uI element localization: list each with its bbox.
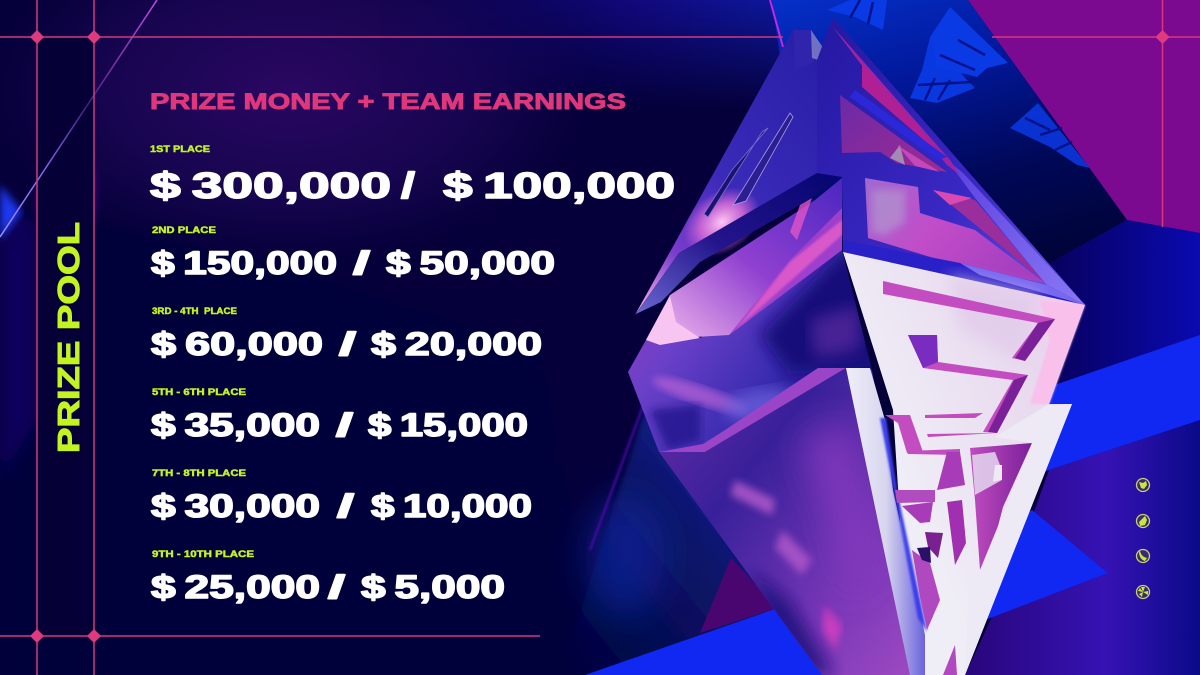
row: 9th-10th place: $ 5,000 [361,569,505,605]
row: 7th-8th place: $ 30,000 [151,488,320,524]
crystal: magenta grooves [883,281,1055,675]
row: 5th-6th place: / [336,407,353,443]
row: 2nd place: / [353,245,370,281]
row: 3rd-4th place [151,306,542,362]
row: 1st place: $ 300,000 [150,165,391,206]
row: 1st place: 1ST PLACE [150,144,210,155]
crystal trophy [628,17,1085,675]
crystal: dark band [636,173,842,314]
row: 3rd-4th place: $ 60,000 [151,326,323,362]
row: 2nd place: $ 150,000 [151,245,337,281]
row: 7th-8th place: 7TH - 8TH PLACE [152,468,246,479]
row: 7th-8th place [151,468,532,524]
icon: sponsor badge 4 [1136,586,1150,598]
row: 5th-6th place [151,387,528,443]
row: 3rd-4th place: 3RD - 4TH PLACE [152,306,237,317]
background panel: navy right [1040,220,1200,385]
heading: PRIZE MONEY + TEAM EARNINGS [150,89,626,114]
crystal: light outer edge [947,160,1085,305]
row: 3rd-4th place: $ 20,000 [371,326,542,362]
row: 7th-8th place: $ 10,000 [371,488,532,524]
crystal: white lower section [843,252,1085,675]
row: 9th-10th place: $ 25,000 [151,569,320,605]
crystal: pink lower facet [646,178,842,345]
background panel: bright blue lower left [585,608,835,675]
crystal: lower left body [628,250,885,452]
background panel: bright blue band [1040,335,1200,473]
background panel: purple lower right [965,420,1200,675]
icon: sponsor badge 2 [1136,514,1150,528]
vertical title: prize pool: PRIZE POOL [52,222,86,453]
row: 9th-10th place: 9TH - 10TH PLACE [152,549,254,560]
crystal: upper left facet [635,17,833,315]
row: 1st place: / [401,165,415,206]
background panel: bright blue triangle [985,510,1108,620]
background panel: dark purple triangle [700,558,778,633]
row: 1st place [150,144,675,206]
row: 3rd-4th place: / [339,326,356,362]
row: 9th-10th place: / [328,569,345,605]
row: 5th-6th place: 5TH - 6TH PLACE [152,387,246,398]
crystal: lower front body [659,368,925,675]
crystal: soft shade on white [950,275,1040,360]
crystal: right white panel [965,404,1072,675]
background panel: magenta corner [968,0,1200,233]
row: 9th-10th place [151,549,505,605]
row: 2nd place: 2ND PLACE [152,225,216,236]
row: 2nd place [151,225,555,281]
icon: sponsor badge 1 [1136,478,1150,492]
row: 2nd place: $ 50,000 [386,245,555,281]
background: blue shard lower left of crystal [560,400,780,675]
crystal: left white strip [846,368,925,675]
row: 1st place: $ 100,000 [443,165,675,206]
crystal: logo slits [733,113,793,205]
neon diagonal near crystal [770,0,783,47]
icon: sponsor badge 3 [1136,550,1150,562]
background panel: dark banner with logo pattern [772,0,1127,300]
row: 5th-6th place: $ 35,000 [151,407,320,443]
row: 7th-8th place: / [337,488,354,524]
crystal: upper right facet [817,17,1085,305]
background [0,0,780,670]
row: 5th-6th place: $ 15,000 [368,407,528,443]
